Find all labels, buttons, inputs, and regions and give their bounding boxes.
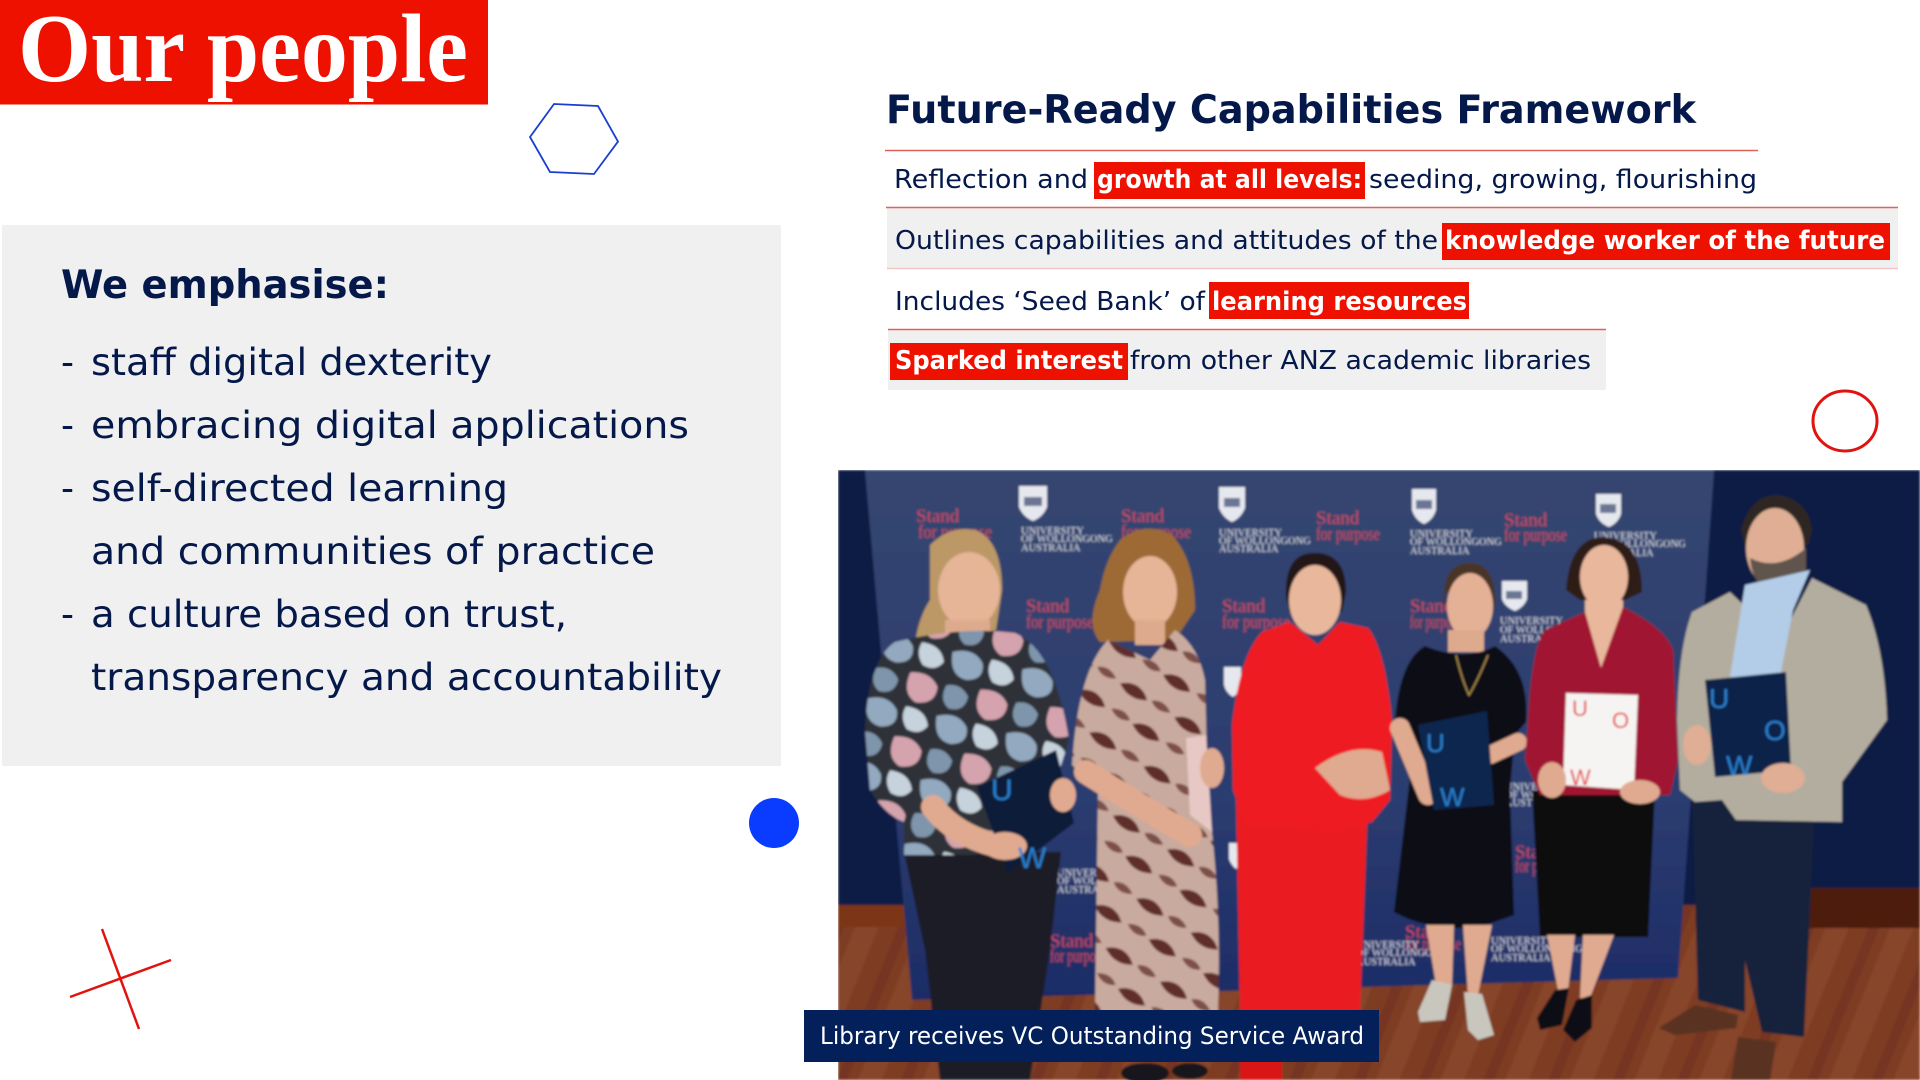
framework row 3: learning resources: [1212, 287, 1467, 317]
backdrop banner: AUSTRALIA: [1594, 548, 1654, 559]
backdrop banner: UNIVERSITY: [1500, 616, 1563, 627]
backdrop banner: OF WOLLONGONG: [1219, 536, 1311, 547]
person 6: grey jacket: U: [1709, 683, 1729, 714]
icon: blue dot: [749, 798, 799, 848]
backdrop banner: for purpose: [1121, 522, 1191, 543]
backdrop banner: Stand: [1504, 510, 1548, 531]
backdrop banner: Stand: [1026, 596, 1070, 617]
backdrop banner: Stand: [1222, 596, 1266, 617]
backdrop banner: for purpose: [1222, 612, 1290, 633]
icon: red cross: [70, 929, 171, 1029]
person 1: floral blouse: U: [991, 774, 1013, 807]
backdrop banner: AUSTRALIA: [1021, 543, 1081, 554]
person 1: floral blouse: [865, 529, 1076, 1080]
backdrop banner: UNIVERSITY: [1219, 528, 1282, 539]
backdrop banner: Stand: [1121, 506, 1165, 527]
person 5: maroon jacket: W: [1570, 765, 1591, 790]
backdrop banner: AUSTRALIA: [1500, 634, 1560, 645]
backdrop banner: Stand: [1410, 596, 1454, 617]
icon: red circle outline: [1813, 391, 1877, 451]
backdrop banner: OF WOLLONGONG: [1491, 944, 1583, 955]
framework row 1: growth at all levels:: [1097, 165, 1362, 195]
backdrop banner: for purpose: [1515, 856, 1571, 877]
person 4: black dress: U: [1426, 728, 1445, 758]
backdrop banner: OF WOLLONGONG: [1356, 948, 1448, 959]
backdrop banner: Stand: [1316, 508, 1360, 529]
backdrop banner: for purpose: [1050, 946, 1106, 967]
person 6: grey jacket: [1659, 495, 1887, 1080]
backdrop banner: AUSTRALIA: [1505, 798, 1565, 809]
person 5: maroon jacket: U: [1572, 696, 1588, 721]
photo caption: [804, 1010, 1379, 1062]
framework row 4: Sparked interest: [895, 346, 1123, 376]
person 4: black dress: [1394, 563, 1526, 1040]
heading: Future-Ready Capabilities Framework: Future-Ready Capabilities Framework: [886, 88, 1697, 133]
framework row 1: [885, 150, 1758, 199]
person 4: black dress: W: [1440, 782, 1465, 812]
person 2: patterned dress: [1072, 529, 1224, 1012]
backdrop banner: UNIVERSITY: [1021, 526, 1084, 537]
framework row 1: seeding, growing, flourishing: [1369, 165, 1757, 195]
framework row 4: from other ANZ academic libraries: [1130, 346, 1591, 376]
backdrop banner: UNIVERSITY: [1356, 940, 1419, 951]
person 6: grey jacket: O: [1764, 715, 1786, 746]
backdrop banner: for purpose: [1026, 612, 1094, 633]
backdrop banner: for purpose: [1316, 524, 1380, 545]
photo: award group portrait: [838, 470, 1920, 1080]
backdrop banner: for purpose: [1405, 934, 1461, 955]
backdrop banner: UNIVERSITY: [1057, 868, 1120, 879]
bullet list: emphasis items: -: [61, 593, 74, 636]
framework row 4: [888, 329, 1606, 390]
framework row 2: Outlines capabilities and attitudes of the: [895, 226, 1438, 256]
backdrop banner: for purpose: [918, 522, 992, 543]
framework row 2: [886, 207, 1898, 268]
backdrop banner: AUSTRALIA: [1491, 953, 1551, 964]
framework row 3: [895, 282, 1469, 319]
backdrop banner: for purpose: [1410, 612, 1460, 633]
bullet list: emphasis items: [61, 341, 722, 699]
backdrop banner: AUSTRALIA: [1219, 544, 1279, 555]
framework row 1: Reflection and: [894, 165, 1088, 195]
shoes below caption: [1121, 1063, 1208, 1080]
framework row 3: Includes ‘Seed Bank’ of: [895, 287, 1206, 317]
person 3: red suit: [1232, 553, 1392, 1080]
bullet list: emphasis items: self-directed learning: [91, 467, 508, 510]
bullet list: emphasis items: -: [61, 404, 74, 447]
person 1: floral blouse: W: [1018, 842, 1047, 875]
framework row 2: knowledge worker of the future: [1445, 226, 1885, 256]
bullet list: emphasis items: transparency and accountability: [91, 656, 722, 699]
backdrop banner: OF WOLLONGONG: [1505, 790, 1597, 801]
backdrop banner: OF WOLLONGONG: [1500, 625, 1592, 636]
bullet list: emphasis items: -: [61, 341, 74, 384]
backdrop banner: Stand: [1405, 922, 1449, 943]
backdrop banner: OF WOLLONGONG: [1594, 539, 1686, 550]
backdrop banner: [865, 470, 1714, 1000]
backdrop banner: UNIVERSITY: [1594, 531, 1657, 542]
backdrop banner: OF WOLLONGONG: [1021, 534, 1113, 545]
person 5: maroon jacket: [1525, 537, 1678, 1042]
bullet list: emphasis items: and communities of practice: [91, 530, 655, 573]
bullet list: emphasis items: -: [61, 467, 74, 510]
icon: blue hexagon outline: [530, 104, 618, 174]
backdrop banner: Stand: [1515, 842, 1559, 863]
person 5: maroon jacket: O: [1612, 708, 1629, 733]
backdrop banner: OF WOLLONGONG: [1410, 537, 1502, 548]
bullet list: emphasis items: staff digital dexterity: [91, 341, 492, 384]
backdrop banner: OF WOLLONGONG: [1057, 876, 1149, 887]
panel: we emphasise: [2, 225, 781, 766]
photo caption: Library receives VC Outstanding Service Award: [820, 1022, 1364, 1050]
bullet list: emphasis items: a culture based on trust,: [91, 593, 567, 636]
person 6: grey jacket: W: [1726, 750, 1753, 781]
bullet list: emphasis items: embracing digital applications: [91, 404, 689, 447]
backdrop banner: AUSTRALIA: [1057, 885, 1117, 896]
backdrop banner: AUSTRALIA: [1410, 546, 1470, 557]
panel heading: We emphasise: We emphasise:: [61, 263, 389, 308]
backdrop banner: for purpose: [1504, 525, 1567, 546]
backdrop banner: UNIVERSITY: [1410, 529, 1473, 540]
backdrop banner: AUSTRALIA: [1356, 957, 1416, 968]
backdrop banner: UNIVERSITY: [1491, 936, 1554, 947]
backdrop banner: Stand: [916, 506, 960, 527]
backdrop banner: Stand: [1050, 931, 1094, 952]
backdrop banner: UNIVERSITY: [1505, 782, 1568, 793]
